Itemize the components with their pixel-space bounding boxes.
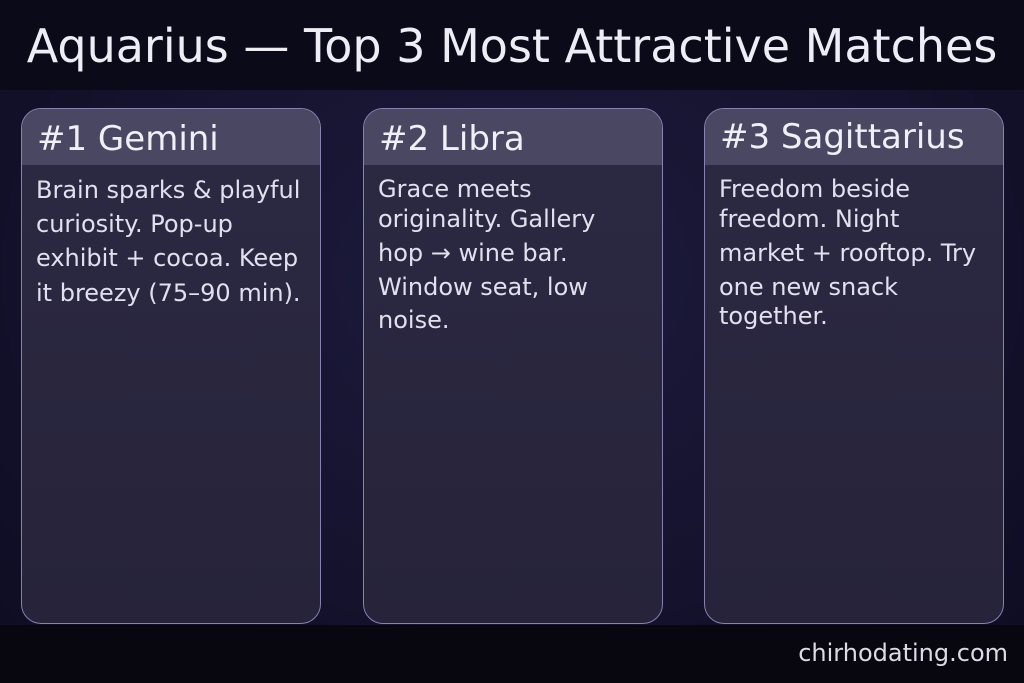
heading: #3 Sagittarius <box>705 109 1003 165</box>
text: Sagittarius description: market + rooftop. Try <box>719 239 976 267</box>
heading: #2 Libra <box>364 109 662 165</box>
text: Sagittarius description <box>719 175 976 330</box>
panel: Gemini <box>21 108 321 624</box>
text: Gemini description: curiosity. Pop-up <box>36 210 233 238</box>
title: Aquarius — Top 3 Most Attractive Matches <box>27 19 997 73</box>
text: Gemini description: it breezy (75–90 min). <box>36 279 301 307</box>
heading: #3 Sagittarius: #3 Sagittarius <box>720 117 965 157</box>
panel: Libra <box>363 108 663 624</box>
text: Libra description: Grace meets <box>378 175 532 203</box>
text: Gemini description: Brain sparks & playful <box>36 176 300 204</box>
text: Libra description <box>378 175 595 334</box>
text: Sagittarius description: freedom. Night <box>719 205 899 233</box>
heading: #1 Gemini: #1 Gemini <box>37 119 219 159</box>
text: Sagittarius description: together. <box>719 302 828 330</box>
text: Gemini description <box>36 176 301 307</box>
text: Libra description: Window seat, low <box>378 273 588 301</box>
text: Sagittarius description: one new snack <box>719 273 898 301</box>
footer url: chirhodating.com <box>798 639 1008 667</box>
text: Libra description: noise. <box>378 306 449 334</box>
text: Libra description: hop → wine bar. <box>378 239 568 267</box>
text: Sagittarius description: Freedom beside <box>719 175 910 203</box>
panel: Sagittarius <box>704 108 1004 624</box>
text: Gemini description: exhibit + cocoa. Keep <box>36 244 298 272</box>
heading: #1 Gemini <box>22 109 320 165</box>
text: Libra description: originality. Gallery <box>378 205 595 233</box>
heading: #2 Libra: #2 Libra <box>379 119 525 159</box>
